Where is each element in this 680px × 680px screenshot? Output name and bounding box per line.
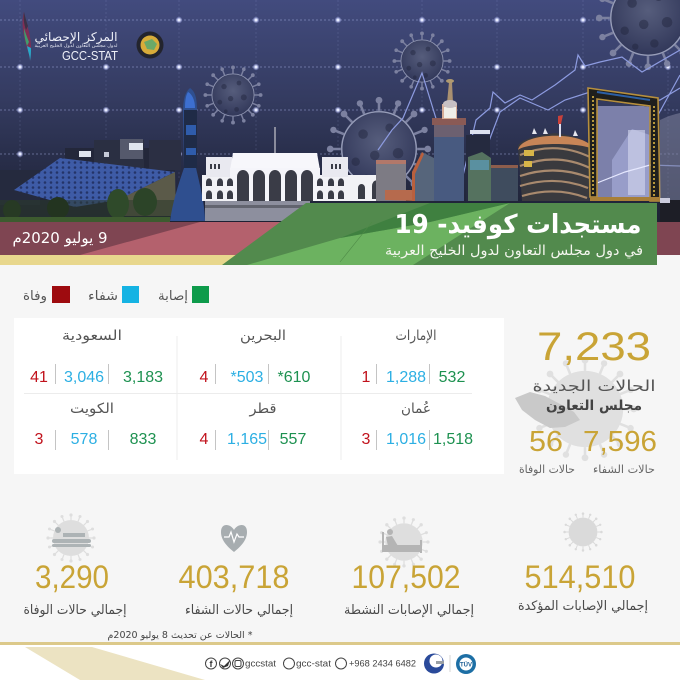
icon: virus <box>563 512 603 552</box>
date ribbon: 9 يوليو 2020م <box>12 229 108 247</box>
panel: country table: 557 <box>280 431 306 448</box>
stat: total deaths: 3,290 <box>35 559 109 595</box>
logo: GCC-STAT <box>23 12 118 63</box>
icon: heart pulse <box>221 525 247 552</box>
panel: country table <box>14 318 504 474</box>
Qatar torch tower <box>170 88 205 221</box>
panel: GCC new cases summary: 56 <box>529 426 563 458</box>
footer: +968 2434 6482 <box>349 658 416 668</box>
logo: GCC-STAT: GCC-STAT <box>62 49 118 63</box>
title banner <box>222 203 657 265</box>
footnote: * الحالات عن تحديث 8 يوليو 2020م <box>108 630 253 641</box>
panel: country table: 1,518 <box>433 431 473 448</box>
icon: patient lying with virus <box>46 513 96 563</box>
panel: GCC new cases summary: حالات الوفاة <box>519 463 575 476</box>
panel: country table: 3 <box>362 431 371 448</box>
icon: patient in bed with virus <box>378 516 430 568</box>
panel: country table: الكويت <box>70 401 114 417</box>
stat: total recovered: 403,718 <box>178 559 290 595</box>
legend: وفاة <box>23 289 47 304</box>
Kuwait museum building <box>0 158 176 222</box>
panel: country table: الإمارات <box>396 328 436 344</box>
panel: country table: 4 <box>200 369 209 386</box>
panel: GCC new cases summary: الحالات الجديدة <box>532 377 656 395</box>
legend <box>23 286 209 304</box>
stat: total deaths <box>24 513 126 618</box>
panel: country table: 3,183 <box>123 369 163 386</box>
contact text: gccstat <box>245 658 277 668</box>
logo: GCC-STAT: المركز الإحصائي <box>34 30 118 45</box>
logo: TUV: TÜV <box>460 662 472 668</box>
virus illustrations <box>203 0 680 201</box>
stat: total active <box>344 516 474 618</box>
footer: f <box>210 659 214 669</box>
stat: total active: 107,502 <box>352 559 460 595</box>
legend: شفاء <box>88 289 118 304</box>
panel: country table: قطر <box>248 401 276 417</box>
panel: country table: السعودية <box>62 328 122 344</box>
stat: total recovered <box>178 525 293 618</box>
stat: total confirmed <box>518 512 648 614</box>
stat: total deaths: إجمالي حالات الوفاة <box>24 603 126 618</box>
logo: GCC emblem <box>136 32 164 58</box>
Oman palace building <box>202 127 400 221</box>
logo: GCC-STAT: لدول مجلس التعاون لدول الخليج العربية <box>34 44 118 49</box>
panel: country table: 4 <box>200 431 209 448</box>
Dubai frame <box>588 88 680 222</box>
panel: country table: 1,288 <box>386 369 426 386</box>
title text: مستجدات كوفيد- 19 <box>394 210 642 240</box>
panel: country table: 3 <box>35 431 44 448</box>
stat: total confirmed: 514,510 <box>524 559 636 595</box>
panel: GCC new cases summary: مجلس التعاون <box>546 398 642 414</box>
panel: country table: 833 <box>130 431 156 448</box>
stat: total active: إجمالي الإصابات النشطة <box>344 603 474 618</box>
panel: country table: 1,016 <box>386 431 426 448</box>
footer <box>0 642 680 680</box>
panel: country table: عُمان <box>401 401 431 417</box>
header photo collage <box>0 0 680 222</box>
panel: GCC new cases summary: حالات الشفاء <box>593 463 655 476</box>
panel: country table: *610 <box>278 369 311 386</box>
logo: certification G <box>424 654 444 674</box>
line chart trend <box>378 50 680 185</box>
panel: GCC new cases summary: 7,233 <box>537 325 651 369</box>
stat: total confirmed: إجمالي الإصابات المؤكدة <box>518 599 648 614</box>
panel: country table: 578 <box>71 431 97 448</box>
legend: إصابة <box>158 289 188 304</box>
panel: GCC new cases summary <box>515 325 657 476</box>
panel: country table: 1,165 <box>227 431 267 448</box>
panel: country table: 3,046 <box>64 369 104 386</box>
panel: country table: 532 <box>439 369 465 386</box>
subtitle text: في دول مجلس التعاون لدول الخليج العربية <box>385 243 643 259</box>
panel: country table: البحرين <box>240 328 286 344</box>
date ribbon <box>0 222 680 265</box>
round tower building <box>518 115 594 201</box>
panel: country table: 1 <box>362 369 371 386</box>
panel: GCC new cases summary: 7,596 <box>583 426 657 458</box>
footer: gcc-stat <box>296 658 332 668</box>
panel: country table: *503 <box>231 369 264 386</box>
Makkah clock tower and towers <box>376 79 518 201</box>
icon: virus and map watermark <box>515 357 637 461</box>
distant city buildings <box>0 139 181 205</box>
logo: TUV <box>456 654 476 674</box>
stat: total recovered: إجمالي حالات الشفاء <box>185 603 293 618</box>
social media icons <box>206 658 346 669</box>
panel: country table: 41 <box>30 369 48 386</box>
